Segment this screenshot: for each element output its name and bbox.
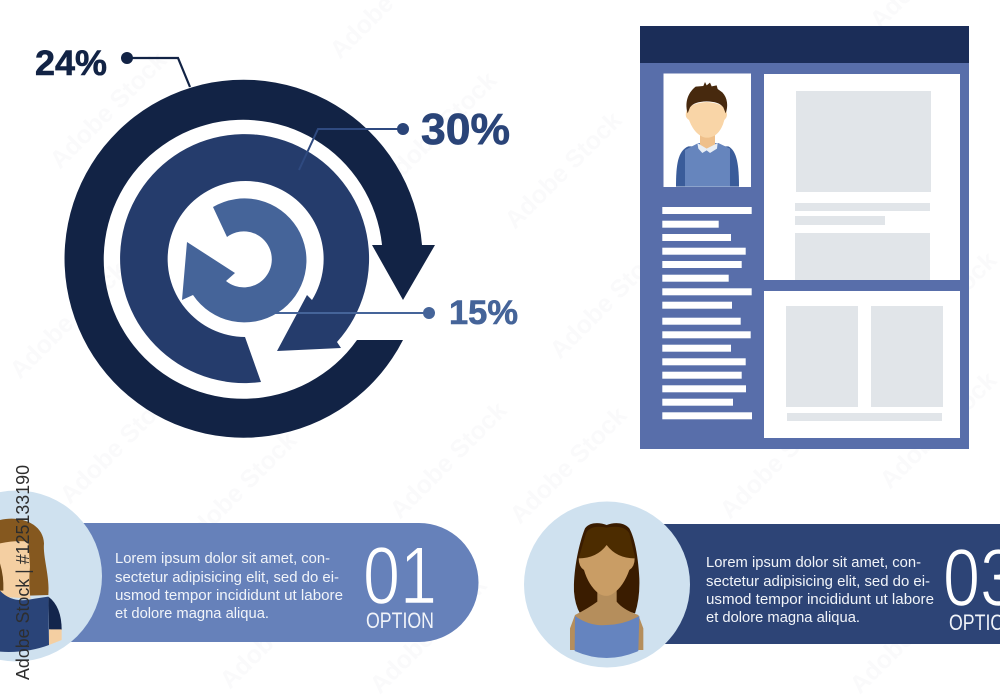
background watermark: Adobe Stock	[374, 66, 502, 194]
resume document	[640, 26, 969, 449]
background watermark: Adobe Stock	[214, 566, 342, 694]
option 01 banner	[0, 490, 478, 662]
leader line 30%	[299, 123, 409, 170]
label 24%: 24%	[35, 44, 107, 83]
option 03 text: Lorem ipsum dolor sit amet, con-	[706, 555, 921, 571]
option label: OPTION	[366, 608, 434, 633]
label 15%: 15%	[449, 294, 518, 332]
label 30%: 30%	[421, 105, 510, 154]
icon: man portrait	[676, 82, 739, 187]
circular arrow chart	[35, 44, 518, 438]
skill lines	[662, 207, 752, 419]
photo frame	[664, 74, 751, 187]
option 03 text: et dolore magna aliqua.	[706, 610, 860, 626]
stock id vertical text: Adobe Stock | #125133190	[13, 465, 33, 680]
option 03 text: usmod tempor incididunt ut labore	[706, 592, 934, 608]
option 03 text: sectetur adipisicing elit, sed do ei-	[706, 574, 930, 590]
upper content card	[764, 74, 960, 280]
avatar circle	[524, 502, 690, 668]
option 01 text: et dolore magna aliqua.	[115, 606, 269, 622]
background watermark: Adobe Stock	[174, 426, 302, 554]
background watermark: Adobe Stock	[544, 236, 672, 364]
document header	[640, 26, 969, 63]
background watermark: Adobe Stock	[384, 396, 512, 524]
background watermark: Adobe Stock	[714, 396, 842, 524]
background watermark: Adobe Stock	[54, 381, 182, 509]
avatar circle	[0, 490, 102, 662]
option 03 banner	[524, 502, 1000, 668]
background watermark: Adobe Stock	[874, 366, 1000, 494]
background watermark: Adobe Stock	[504, 401, 632, 529]
document body	[640, 26, 969, 449]
banner shape	[650, 524, 1000, 644]
outer arrow: 24%	[65, 80, 435, 438]
icon: woman with brown hair	[0, 519, 62, 652]
background watermark: Adobe Stock	[499, 106, 627, 234]
number 01: 01	[363, 530, 437, 622]
banner shape	[60, 523, 478, 642]
background watermark: Adobe Stock	[4, 256, 132, 384]
option 01 text: sectetur adipisicing elit, sed do ei-	[115, 570, 339, 586]
background watermark: Adobe Stock	[874, 246, 1000, 374]
leader line 24%	[121, 52, 190, 87]
middle arrow: 30%	[120, 134, 369, 383]
leader line 15%	[272, 307, 435, 319]
lower content card	[764, 291, 960, 438]
background watermark: Adobe Stock	[44, 46, 172, 174]
option 01 text: Lorem ipsum dolor sit amet, con-	[115, 551, 330, 567]
icon: woman with dark hair	[570, 523, 643, 658]
inner arrow: 15%	[182, 198, 306, 322]
option 01 text: usmod tempor incididunt ut labore	[115, 588, 343, 604]
